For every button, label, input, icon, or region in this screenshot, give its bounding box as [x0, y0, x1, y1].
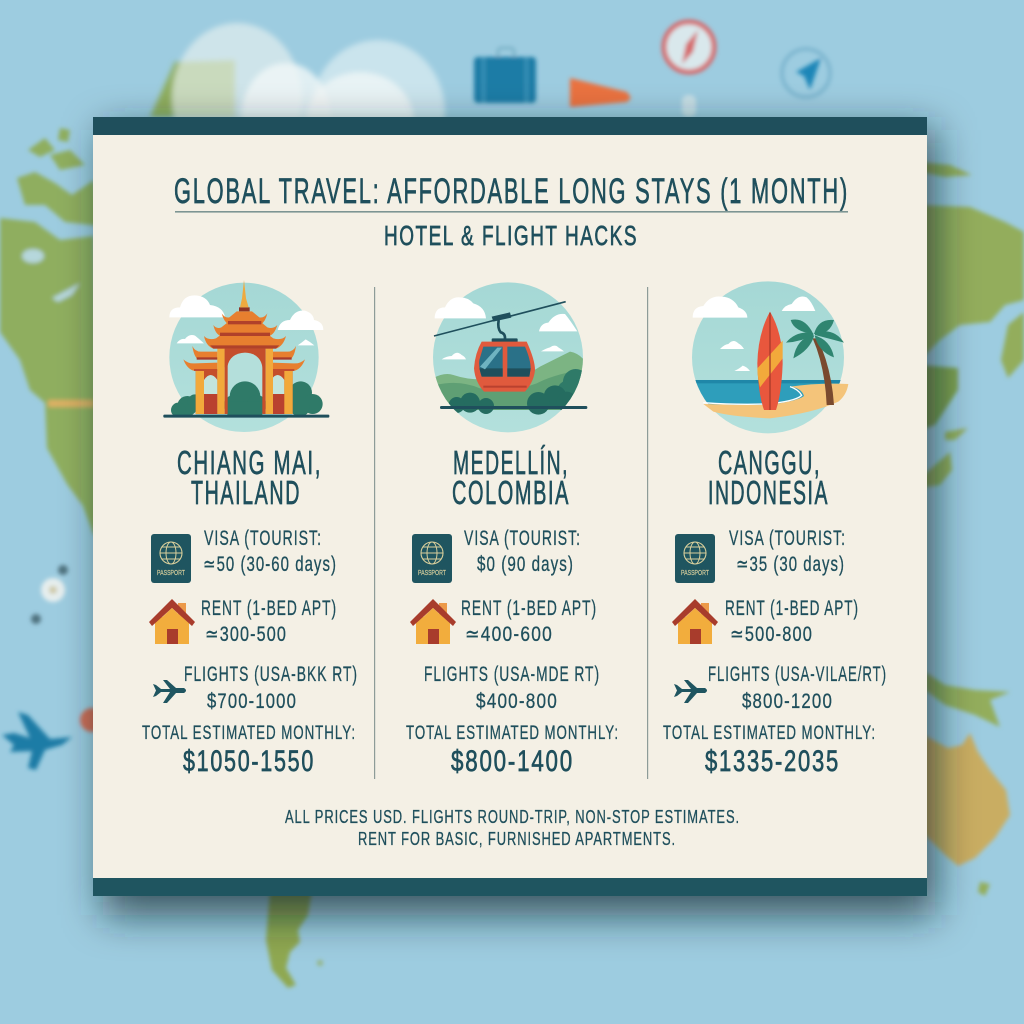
city name: Canggu: CANGGU,: [718, 444, 821, 481]
rent label: RENT (1-BED APT): [725, 597, 859, 620]
rent value: ≃400-600: [465, 623, 553, 646]
icon: passport: PASSPORT: [681, 570, 710, 577]
icon: passport: PASSPORT: [418, 570, 447, 577]
footnote: ALL PRICES USD. FLIGHTS ROUND-TRIP, NON-STOP ESTIMATES.: [285, 806, 740, 827]
illustration: Canggu beach surfboard: [690, 281, 848, 433]
icon: house: [410, 599, 456, 644]
footnote: RENT FOR BASIC, FURNISHED APARTMENTS.: [358, 828, 676, 849]
icon: passport: [151, 534, 191, 583]
surfboard: [757, 312, 783, 410]
continent: Eurasia: [920, 162, 1024, 896]
rent value: ≃300-500: [205, 623, 287, 646]
icon: house: [149, 599, 195, 644]
hanger: [492, 312, 511, 322]
flights value: $400-800: [476, 690, 558, 713]
icon: passport: PASSPORT: [157, 570, 186, 577]
panel shadow: [103, 130, 935, 915]
blurred navigation dial: [782, 49, 830, 97]
central arch: [225, 347, 265, 367]
icon: plane: [674, 680, 707, 703]
flights value: $700-1000: [207, 690, 297, 713]
continent: North America: [0, 128, 100, 540]
side bushes: [171, 381, 323, 417]
rent label: RENT (1-BED APT): [461, 597, 597, 620]
blurred compass: [664, 22, 714, 117]
main panel: [93, 117, 927, 896]
total value: $800-1400: [451, 745, 574, 778]
blurred clouds: [150, 23, 445, 184]
total label: TOTAL ESTIMATED MONTHLY:: [663, 723, 876, 744]
city name: Chiang Mai: CHIANG MAI,: [177, 444, 322, 481]
column: Medellin: [406, 444, 619, 778]
top bar: [93, 117, 927, 135]
country name: Indonesia: INDONESIA: [708, 474, 829, 511]
flights value: $800-1200: [742, 690, 833, 713]
flights label: FLIGHTS (USA-BKK RT): [184, 663, 358, 686]
total label: TOTAL ESTIMATED MONTHLY:: [142, 723, 356, 744]
continent: Australia: [920, 733, 1010, 866]
bottom bar: [93, 878, 927, 896]
total label: TOTAL ESTIMATED MONTHLY:: [406, 723, 619, 744]
column: Chiang Mai: [142, 444, 358, 778]
total value: $1050-1550: [183, 745, 315, 778]
footnote: [285, 806, 740, 849]
ground line: [440, 406, 587, 409]
visa label: VISA (TOURIST:: [729, 527, 846, 550]
blurred plane: [2, 712, 72, 770]
icon: passport: [675, 534, 715, 583]
continent: South America tip: [266, 890, 323, 988]
icon: passport: [412, 534, 452, 583]
palm trunk: [813, 338, 834, 405]
icon: house: [672, 599, 718, 644]
country name: Thailand: THAILAND: [191, 474, 301, 511]
blurred orange flag: [570, 78, 631, 107]
illustration: Chiang Mai temple gate: [163, 280, 329, 432]
cable: [434, 302, 566, 336]
tiered roofs: [204, 333, 286, 349]
ground line: [163, 415, 329, 418]
side gate wings: [183, 346, 217, 414]
city name: Medellin: MEDELLÍN,: [453, 444, 569, 481]
flights label: FLIGHTS (USA-MDE RT): [424, 663, 600, 686]
blurred location dots: [31, 565, 104, 732]
visa value: ≃50 (30-60 days): [203, 553, 337, 576]
flights label: FLIGHTS (USA-VILAE/RT): [708, 663, 887, 686]
visa label: VISA (TOURIST:: [204, 527, 322, 550]
visa value: $0 (90 days): [477, 553, 574, 576]
column: Canggu: [663, 444, 887, 778]
rent label: RENT (1-BED APT): [201, 597, 337, 620]
icon: plane: [153, 680, 186, 703]
cabin: [474, 342, 535, 392]
illustration: Medellin cable car: [430, 282, 588, 432]
visa value: ≃35 (30 days): [736, 553, 845, 576]
total value: $1335-2035: [705, 745, 840, 778]
country name: Colombia: COLOMBIA: [452, 474, 570, 511]
visa label: VISA (TOURIST:: [464, 527, 581, 550]
palm fronds: [786, 319, 844, 358]
rent value: ≃500-800: [730, 623, 813, 646]
blurred suitcase: [474, 48, 536, 103]
subtitle: HOTEL & FLIGHT HACKS: [384, 220, 638, 251]
